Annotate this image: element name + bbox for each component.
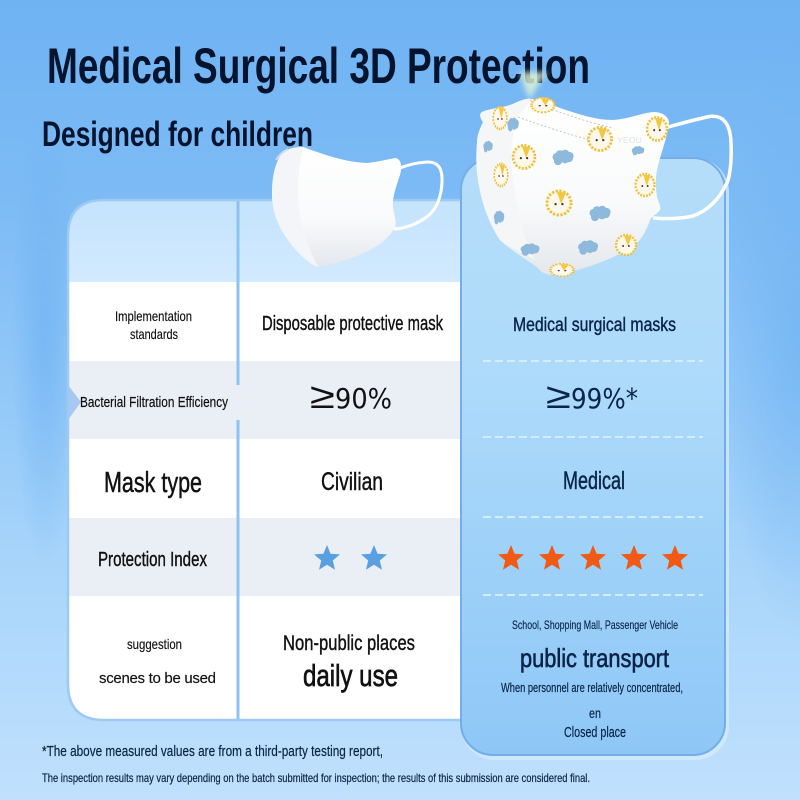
row 5 value: non-public places, daily use: Non-public places xyxy=(283,632,415,655)
footnote: The inspection results may vary depending on the batch submitted for inspection; the results of this submission are considered final. xyxy=(42,771,590,785)
icon: patterned medical mask with lions and clouds: YEOU xyxy=(617,136,642,145)
icon: two blue stars xyxy=(314,545,387,570)
row 1 value: medical: Medical surgical masks xyxy=(513,315,676,336)
icon: white disposable mask xyxy=(272,147,442,267)
row 3 label: mask type: Mask type xyxy=(104,467,202,499)
title: Medical Surgical 3D Protection xyxy=(47,38,590,94)
row 2 value: 99 percent xyxy=(546,375,638,416)
row 1 label: implementation standards xyxy=(115,308,192,342)
row 5 value: medical mask scenarios: Closed place xyxy=(564,724,626,741)
row 5 value: medical mask scenarios: en xyxy=(589,705,601,721)
row 5 value: medical mask scenarios xyxy=(501,618,683,741)
row 2 value: 90 percent: 90% xyxy=(335,382,392,415)
icon: patterned medical mask with lions and clouds xyxy=(476,72,731,276)
row 3 value: medical: Medical xyxy=(563,467,625,495)
row 5 value: non-public places, daily use xyxy=(283,632,415,693)
subtitle: Designed for children xyxy=(42,115,313,154)
panel: medical surgical mask column xyxy=(461,158,729,760)
row 1 label: implementation standards: Implementation xyxy=(115,308,192,324)
row 2 value: 99 percent: ≥ xyxy=(546,375,571,416)
row 5 value: medical mask scenarios: public transport xyxy=(520,643,670,673)
row 5 value: medical mask scenarios: School, Shopping Mall, Passenger Vehicle xyxy=(512,618,678,632)
row 5 label: suggested scenes: suggestion xyxy=(127,636,182,652)
row 3 value: civilian: Civilian xyxy=(321,468,383,496)
row 5 value: non-public places, daily use: daily use xyxy=(303,658,398,693)
icon: five orange stars xyxy=(498,545,688,570)
row 2 value: 90 percent: ≥ xyxy=(310,375,335,416)
row 2 label: bacterial filtration efficiency: Bacterial Filtration Efficiency xyxy=(80,394,228,411)
footnote: *The above measured values are from a third-party testing report, xyxy=(42,743,383,760)
row 5 label: suggested scenes: scenes to be used xyxy=(99,670,216,687)
row 1 value: disposable: Disposable protective mask xyxy=(262,313,444,335)
row 5 value: medical mask scenarios: When personnel are relatively concentrated, xyxy=(501,680,683,695)
row 1 label: implementation standards: standards xyxy=(130,326,178,342)
panel: standard mask comparison column xyxy=(68,200,462,722)
row 4 label: protection index: Protection Index xyxy=(98,549,207,571)
row 5 label: suggested scenes xyxy=(99,636,216,687)
row 2 value: 99 percent: 99%* xyxy=(571,382,638,415)
row 2 value: 90 percent xyxy=(310,375,392,416)
footnote xyxy=(42,743,590,785)
